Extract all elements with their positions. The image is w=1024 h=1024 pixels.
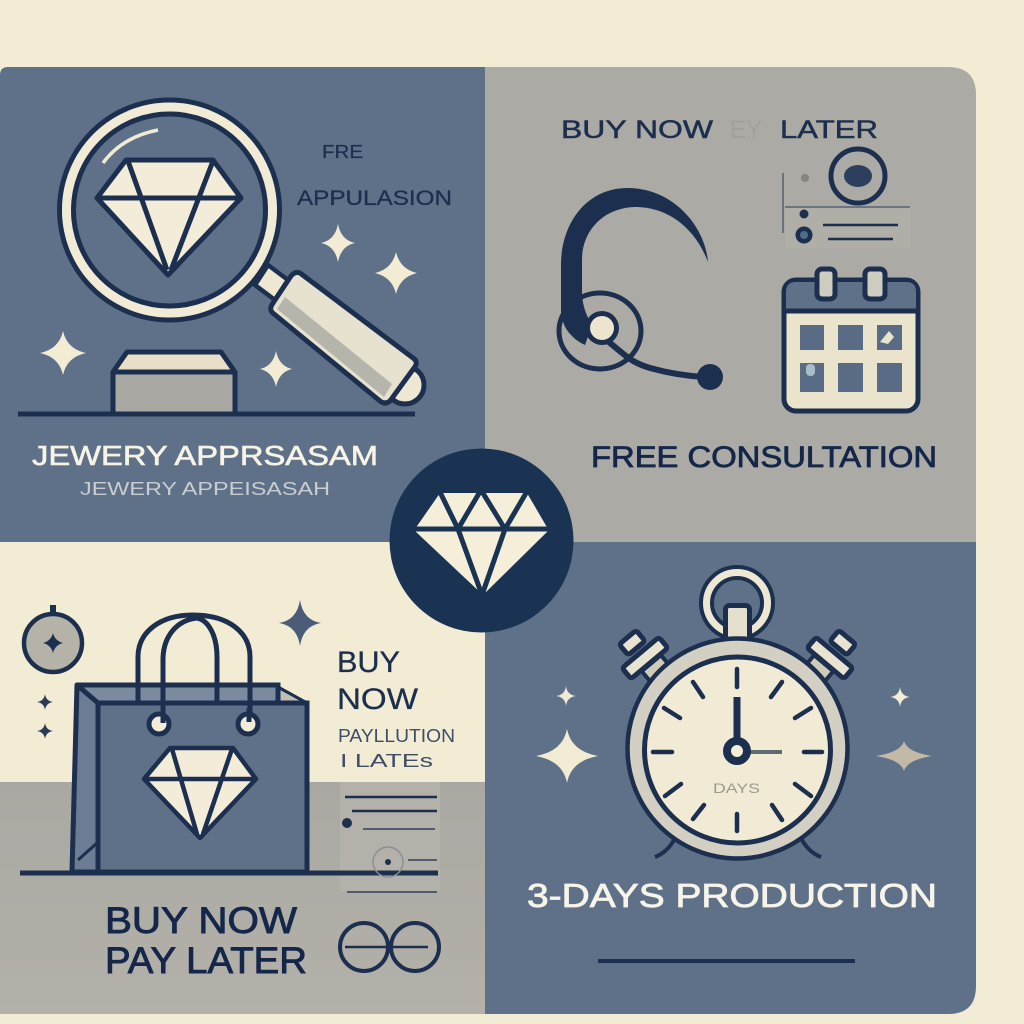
subheading: jewelry appraisal: JEWERY APPEISASAH bbox=[80, 479, 330, 499]
icon: small circle with star bbox=[24, 605, 82, 739]
text: free appraisal label: APPULASION bbox=[297, 187, 452, 210]
panel: buy now pay later bbox=[0, 542, 485, 1014]
icon: jewelry box bbox=[113, 352, 235, 414]
icon: sparkles bbox=[40, 224, 417, 387]
heading: buy now pay later: LATER bbox=[780, 116, 878, 144]
icon: right button bbox=[798, 622, 866, 690]
text: free appraisal label bbox=[297, 142, 452, 210]
icon: center diamond badge bbox=[390, 448, 574, 632]
panel: free consultation bbox=[485, 67, 976, 542]
icon: left button bbox=[609, 622, 677, 690]
text: buy now bbox=[337, 646, 419, 716]
text: blurred payment label: I LATEs bbox=[340, 751, 433, 771]
icon: stopwatch bbox=[593, 572, 866, 858]
text: buy now: NOW bbox=[337, 683, 419, 716]
heading: buy now pay later: EY bbox=[730, 116, 762, 144]
text: buy now: BUY bbox=[337, 646, 400, 679]
heading: buy now pay later: PAY LATER bbox=[105, 940, 307, 981]
heading: buy now pay later bbox=[105, 900, 307, 981]
icon: linked rings bbox=[340, 923, 439, 971]
icon: stopwatch: DAYS bbox=[713, 780, 760, 796]
heading: free consultation: FREE CONSULTATION bbox=[591, 441, 937, 474]
heading: 3-days production: 3-DAYS PRODUCTION bbox=[527, 877, 937, 914]
icon: magnifying glass with diamond bbox=[60, 100, 424, 404]
icon: small document list bbox=[783, 149, 910, 248]
heading: buy now pay later bbox=[561, 116, 878, 144]
icon: headset bbox=[559, 188, 723, 390]
icon: dark sparkle bbox=[279, 600, 321, 646]
icon: small list bbox=[342, 797, 437, 892]
heading: jewelry appraisal: JEWERY APPRSASAM bbox=[32, 440, 378, 471]
icon: shopping bag with diamond bbox=[72, 615, 307, 872]
text: free appraisal label: FRE bbox=[322, 142, 363, 162]
panel: 3-days production bbox=[485, 542, 976, 1014]
icon: sparkles bbox=[536, 686, 932, 783]
text: blurred payment label bbox=[338, 726, 455, 771]
icon: calendar bbox=[784, 269, 918, 411]
panel: jewelry appraisal bbox=[0, 67, 485, 542]
heading: buy now pay later: BUY NOW bbox=[105, 900, 297, 941]
text: blurred payment label: PAYLLUTION bbox=[338, 726, 455, 746]
heading: buy now pay later: BUY NOW bbox=[561, 116, 714, 144]
